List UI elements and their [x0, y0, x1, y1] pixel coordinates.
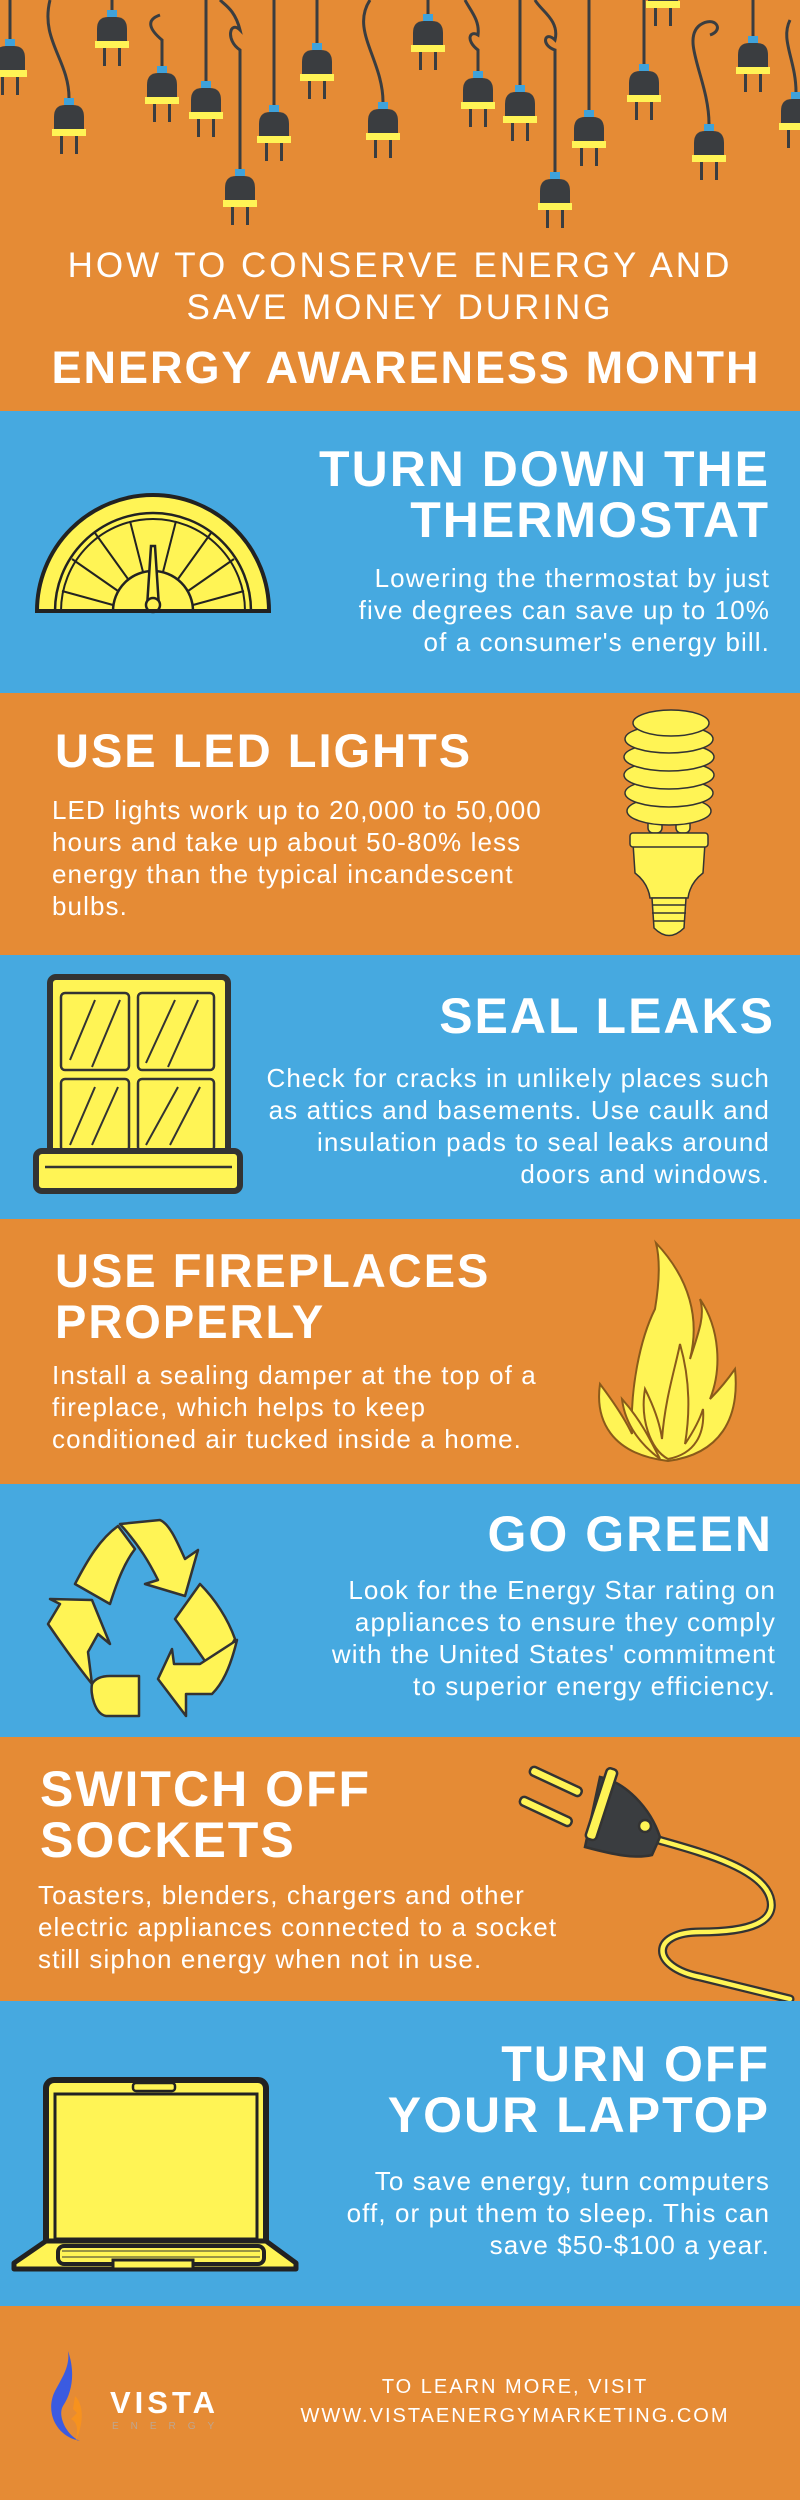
text: fireplaces	[52, 1360, 537, 1454]
heading: turn off your laptop: TURN OFF	[501, 2036, 770, 2092]
icon: plug	[518, 1766, 794, 2001]
text: fireplaces: fireplace, which helps to keep	[52, 1392, 426, 1422]
heading: go green: GO GREEN	[488, 1506, 773, 1562]
heading: switch off sockets: SOCKETS	[40, 1812, 296, 1868]
text: LED: LED lights work up to 20,000 to 50,000	[52, 795, 542, 825]
heading: use fireplaces properly	[55, 1244, 490, 1348]
text: go green: to superior energy efficiency.	[413, 1671, 776, 1701]
text: go green: with the United States' commitment	[332, 1639, 776, 1669]
text: seal leaks: as attics and basements. Use caulk and	[269, 1095, 770, 1125]
heading: turn off your laptop: YOUR LAPTOP	[388, 2087, 770, 2143]
heading: seal leaks: SEAL LEAKS	[439, 988, 775, 1044]
text: laptop	[347, 2166, 770, 2260]
icon: laptop	[12, 2077, 298, 2272]
panel: go green	[0, 1484, 800, 1737]
text: sockets	[38, 1880, 557, 1974]
text: fireplaces: Install a sealing damper at the top of a	[52, 1360, 537, 1390]
panel: LED lights	[0, 693, 800, 955]
text: laptop: save $50-$100 a year.	[490, 2230, 770, 2260]
hanging plugs decoration	[0, 0, 800, 228]
heading: turn down the thermostat: THERMOSTAT	[410, 492, 770, 548]
text: sockets: still siphon energy when not in use.	[38, 1944, 482, 1974]
text: fireplaces: conditioned air tucked inside a home.	[52, 1424, 522, 1454]
icon: flame	[598, 1240, 737, 1462]
text: thermostat	[359, 563, 770, 657]
heading: use fireplaces properly: PROPERLY	[55, 1295, 325, 1348]
text: LED: hours and take up about 50-80% less	[52, 827, 521, 857]
text: go green: Look for the Energy Star rating on	[348, 1575, 776, 1605]
heading: switch off sockets	[40, 1761, 371, 1868]
text: laptop: To save energy, turn computers	[375, 2166, 770, 2196]
heading: turn off your laptop	[388, 2036, 770, 2143]
panel: seal leaks	[0, 955, 800, 1219]
icon: recycle symbol	[46, 1518, 238, 1718]
icon: window	[33, 974, 243, 1194]
title subtitle: HOW TO CONSERVE ENERGY AND	[68, 246, 732, 285]
panel: fireplaces	[0, 1219, 800, 1484]
icon: light bulb	[623, 709, 715, 936]
text: seal leaks	[266, 1063, 770, 1189]
footer panel	[0, 2306, 800, 2500]
text: go green	[332, 1575, 776, 1701]
call to action: WWW.VISTAENERGYMARKETING.COM	[301, 2405, 729, 2427]
logo: vista energy	[51, 2351, 226, 2442]
text: LED	[52, 795, 542, 921]
icon: thermostat dial	[35, 493, 271, 614]
text: sockets: electric appliances connected to a socket	[38, 1912, 557, 1942]
text: LED: energy than the typical incandescent	[52, 859, 514, 889]
text: seal leaks: doors and windows.	[520, 1159, 770, 1189]
panel: laptop	[0, 2001, 800, 2306]
heading: use fireplaces properly: USE FIREPLACES	[55, 1244, 490, 1297]
text: thermostat: five degrees can save up to 10%	[359, 595, 770, 625]
text: VISTA: VISTA	[110, 2385, 219, 2420]
call to action: TO LEARN MORE, VISIT	[382, 2376, 648, 2398]
icon: flame logo	[51, 2351, 82, 2442]
panel: thermostat	[0, 411, 800, 693]
panel: sockets	[0, 1737, 800, 2001]
text: thermostat: Lowering the thermostat by just	[375, 563, 770, 593]
title subtitle: SAVE MONEY DURING	[186, 288, 614, 327]
text: laptop: off, or put them to sleep. This can	[347, 2198, 770, 2228]
text: sockets: Toasters, blenders, chargers and other	[38, 1880, 525, 1910]
text: seal leaks: Check for cracks in unlikely places such	[266, 1063, 770, 1093]
call to action	[300, 2376, 729, 2427]
heading: turn down the thermostat	[319, 441, 770, 548]
text: thermostat: of a consumer's energy bill.	[424, 627, 770, 657]
text: ENERGY: ENERGY	[112, 2421, 226, 2432]
title subtitle	[68, 246, 732, 327]
title: ENERGY AWARENESS MONTH	[51, 342, 761, 393]
header panel	[0, 0, 800, 411]
heading: use LED lights: USE LED LIGHTS	[55, 724, 472, 777]
text: seal leaks: insulation pads to seal leaks around	[317, 1127, 770, 1157]
text: go green: appliances to ensure they comply	[355, 1607, 776, 1637]
heading: turn down the thermostat: TURN DOWN THE	[319, 441, 770, 497]
text: LED: bulbs.	[52, 891, 128, 921]
heading: switch off sockets: SWITCH OFF	[40, 1761, 371, 1817]
